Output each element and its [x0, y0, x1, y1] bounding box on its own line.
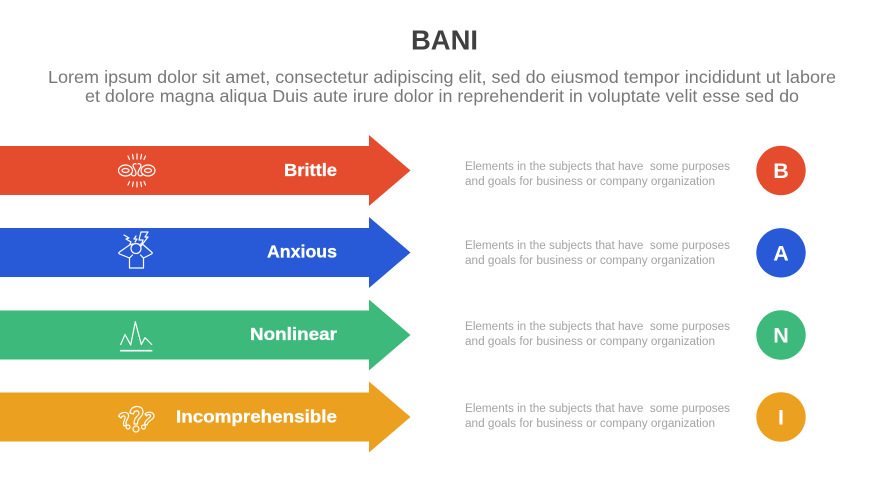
intro paragraph: et dolore magna aliqua Duis aute irure dolor in reprehenderit in voluptate velit esse sed do [85, 86, 799, 106]
icon: broken chain [118, 154, 155, 187]
description: Anxious: and goals for business or company organization [465, 255, 715, 267]
icon: nonlinear spikes [121, 322, 152, 351]
badge: N [756, 310, 806, 360]
description: Nonlinear [465, 321, 730, 348]
description: Anxious: Elements in the subjects that have some purposes [465, 240, 730, 252]
icon: anxious person [119, 232, 152, 268]
arrow: Brittle [0, 135, 410, 206]
description: Nonlinear: Elements in the subjects that have some purposes [465, 321, 730, 333]
description: Incomprehensible: and goals for business or company organization [465, 418, 715, 430]
intro paragraph [48, 67, 836, 106]
arrow: Anxious [0, 217, 410, 288]
label: Brittle: Brittle [284, 160, 337, 180]
badge: A: A [773, 242, 789, 266]
panel: Incomprehensible row [0, 382, 806, 452]
description: Brittle: and goals for business or company organization [465, 176, 715, 188]
title: BANI [411, 24, 478, 56]
arrow: Incomprehensible [0, 382, 410, 452]
intro paragraph: Lorem ipsum dolor sit amet, consectetur adipiscing elit, sed do eiusmod tempor incididunt ut labore [48, 67, 836, 87]
badge: B: B [773, 159, 789, 183]
badge: N: N [773, 324, 789, 348]
badge: B [756, 146, 806, 195]
description: Nonlinear: and goals for business or company organization [465, 336, 715, 348]
description: Anxious [465, 240, 730, 267]
panel: Nonlinear row [0, 300, 806, 370]
badge: A [756, 228, 806, 278]
label: Anxious: Anxious [267, 242, 337, 262]
description: Incomprehensible [465, 403, 730, 430]
badge: I: I [778, 406, 784, 430]
panel: Anxious row [0, 217, 806, 288]
arrow: Nonlinear [0, 300, 410, 370]
description: Brittle: Elements in the subjects that have some purposes [465, 161, 730, 173]
icon: question marks [118, 406, 154, 432]
label: Incomprehensible: Incomprehensible [176, 406, 337, 426]
badge: I [756, 392, 806, 442]
description: Brittle [465, 161, 730, 188]
label: Nonlinear: Nonlinear [250, 324, 337, 344]
panel: Brittle row [0, 135, 806, 206]
description: Incomprehensible: Elements in the subjects that have some purposes [465, 403, 730, 415]
